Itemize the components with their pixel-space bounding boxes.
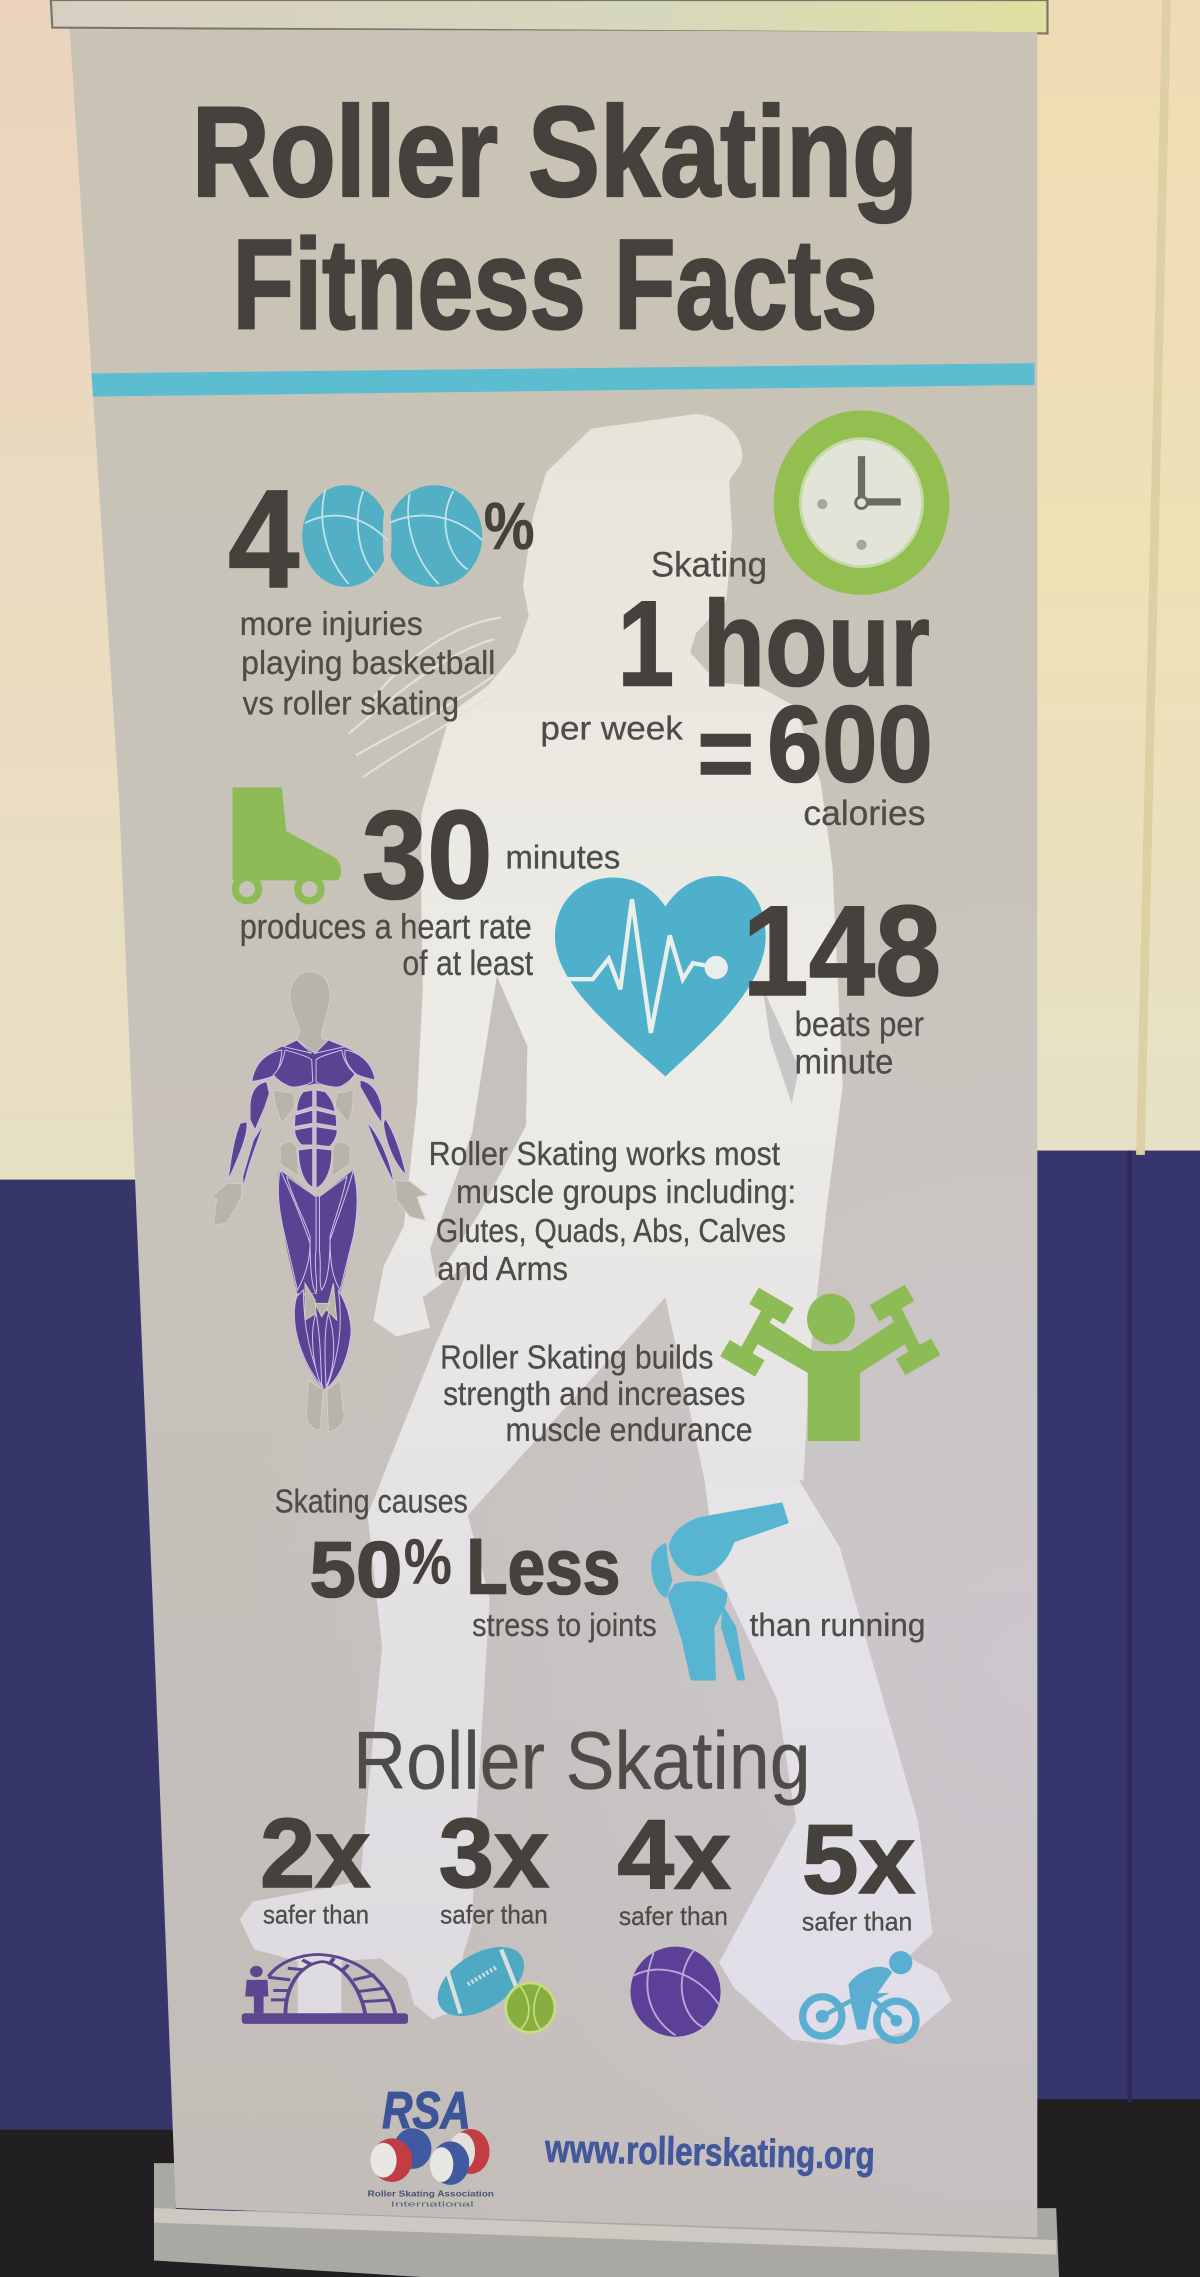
comparison: 3x safer than ball sports: safer than	[440, 1899, 548, 1929]
text: strength and endurance: Roller Skating builds	[440, 1339, 713, 1376]
text: strength and endurance: muscle endurance	[506, 1412, 753, 1449]
comparison: 5x safer than cycling: safer than	[802, 1907, 912, 1937]
icon: basketball zeros	[302, 485, 482, 587]
comparison: 3x safer than ball sports: 3x	[439, 1798, 549, 1908]
stat: one hour per week equals 600 calories: 600	[767, 684, 933, 806]
icon: football and tennis ball	[426, 1933, 555, 2032]
icon: knee joint	[652, 1504, 787, 1679]
comparison: 4x safer than basketball	[617, 1800, 731, 2037]
stat: 148 beats per minute: 148	[742, 880, 941, 1023]
stat: 30 minutes: minutes	[506, 840, 620, 877]
logo: RSA: Roller Skating Association	[368, 2189, 494, 2199]
stat: 400 percent injuries: %	[484, 490, 535, 564]
stat: one hour per week equals 600 calories: =	[697, 695, 754, 812]
text: muscle groups: Glutes, Quads, Abs, Calves	[436, 1213, 786, 1250]
comparison: 4x safer than basketball: safer than	[619, 1901, 728, 1931]
title: Fitness Facts	[232, 213, 877, 356]
comparison: 3x safer than ball sports	[426, 1798, 555, 2032]
text: strength and endurance	[440, 1339, 753, 1449]
text: strength and endurance: strength and increases	[443, 1376, 745, 1413]
hair strands	[349, 617, 501, 777]
icon: climbing arch	[242, 1955, 408, 2024]
stat: one hour per week equals 600 calories: calories	[803, 794, 925, 833]
title: Roller Skating	[192, 81, 918, 224]
text: muscle groups: Roller Skating works most	[429, 1136, 781, 1173]
comparison: 5x safer than cycling: 5x	[802, 1804, 915, 1914]
text: muscle groups: muscle groups including:	[456, 1174, 796, 1211]
stat: 30 minutes	[232, 786, 620, 983]
logo: RSA	[368, 2082, 494, 2209]
stat: one hour per week equals 600 calories	[540, 410, 949, 833]
website url: www.rollerskating.org	[544, 2127, 875, 2178]
stat: 50 percent less stress: 50	[309, 1526, 402, 1614]
stat: 30 minutes: produces a heart rate	[240, 907, 532, 946]
icon: purple basketball	[631, 1947, 721, 2037]
stat: 148 beats per minute: minute	[795, 1043, 893, 1082]
stat: 50 percent less stress: stress to joints	[472, 1607, 657, 1643]
logo: RSA: International	[391, 2200, 474, 2209]
stat: 400 percent injuries: more injuries	[240, 606, 423, 643]
stat: one hour per week equals 600 calories: Skating	[651, 546, 767, 585]
stat: 50 percent less stress: Skating causes	[275, 1483, 468, 1520]
right leg and skate	[705, 1480, 952, 2045]
text: muscle groups	[429, 1136, 796, 1288]
stat: 50 percent less stress: than running	[750, 1607, 925, 1643]
comparison: 5x safer than cycling	[802, 1804, 916, 2040]
stat: 148 beats per minute: beats per	[795, 1005, 924, 1044]
stat: 50 percent less stress: Less	[466, 1523, 620, 1611]
stat: 50 percent less stress	[275, 1483, 925, 1679]
icon: muscle figure	[210, 972, 427, 1432]
banner panel	[70, 29, 1037, 2237]
stat: 30 minutes: of at least	[402, 944, 533, 983]
left side of body and left leg	[240, 414, 843, 2019]
skater silhouette	[240, 414, 952, 2045]
banner stand base	[154, 2163, 1059, 2277]
stat: 400 percent injuries: vs roller skating	[243, 686, 459, 723]
icon: person lifting dumbbells	[725, 1293, 936, 1441]
blue divider	[92, 363, 1034, 397]
icon: clock	[774, 410, 949, 595]
comparison: 2x safer than gymnastics	[242, 1798, 408, 2024]
stat: 50 percent less stress: %	[404, 1525, 452, 1597]
heading: Roller Skating: Roller Skating	[353, 1715, 811, 1806]
stat: 30 minutes: 30	[362, 786, 492, 925]
icon: heart with pulse	[555, 876, 766, 1076]
stat: 148 beats per minute	[555, 876, 941, 1082]
logo: RSA: RSA	[382, 2082, 471, 2140]
top rail	[51, 0, 1047, 33]
stat: 400 percent injuries: playing basketball	[241, 645, 495, 682]
stat: one hour per week equals 600 calories: per week	[540, 710, 683, 747]
title	[192, 81, 918, 356]
stat: 400 percent injuries: 4	[228, 461, 299, 617]
stat: one hour per week equals 600 calories: 1 hour	[617, 576, 930, 712]
comparison: 2x safer than gymnastics: 2x	[260, 1798, 371, 1908]
comparison: 4x safer than basketball: 4x	[617, 1800, 731, 1910]
text: muscle groups: and Arms	[437, 1251, 568, 1288]
stat: 400 percent injuries	[228, 461, 535, 723]
icon: cyclist	[803, 1951, 916, 2040]
comparison: 2x safer than gymnastics: safer than	[263, 1899, 369, 1929]
icon: roller skate	[232, 787, 341, 901]
